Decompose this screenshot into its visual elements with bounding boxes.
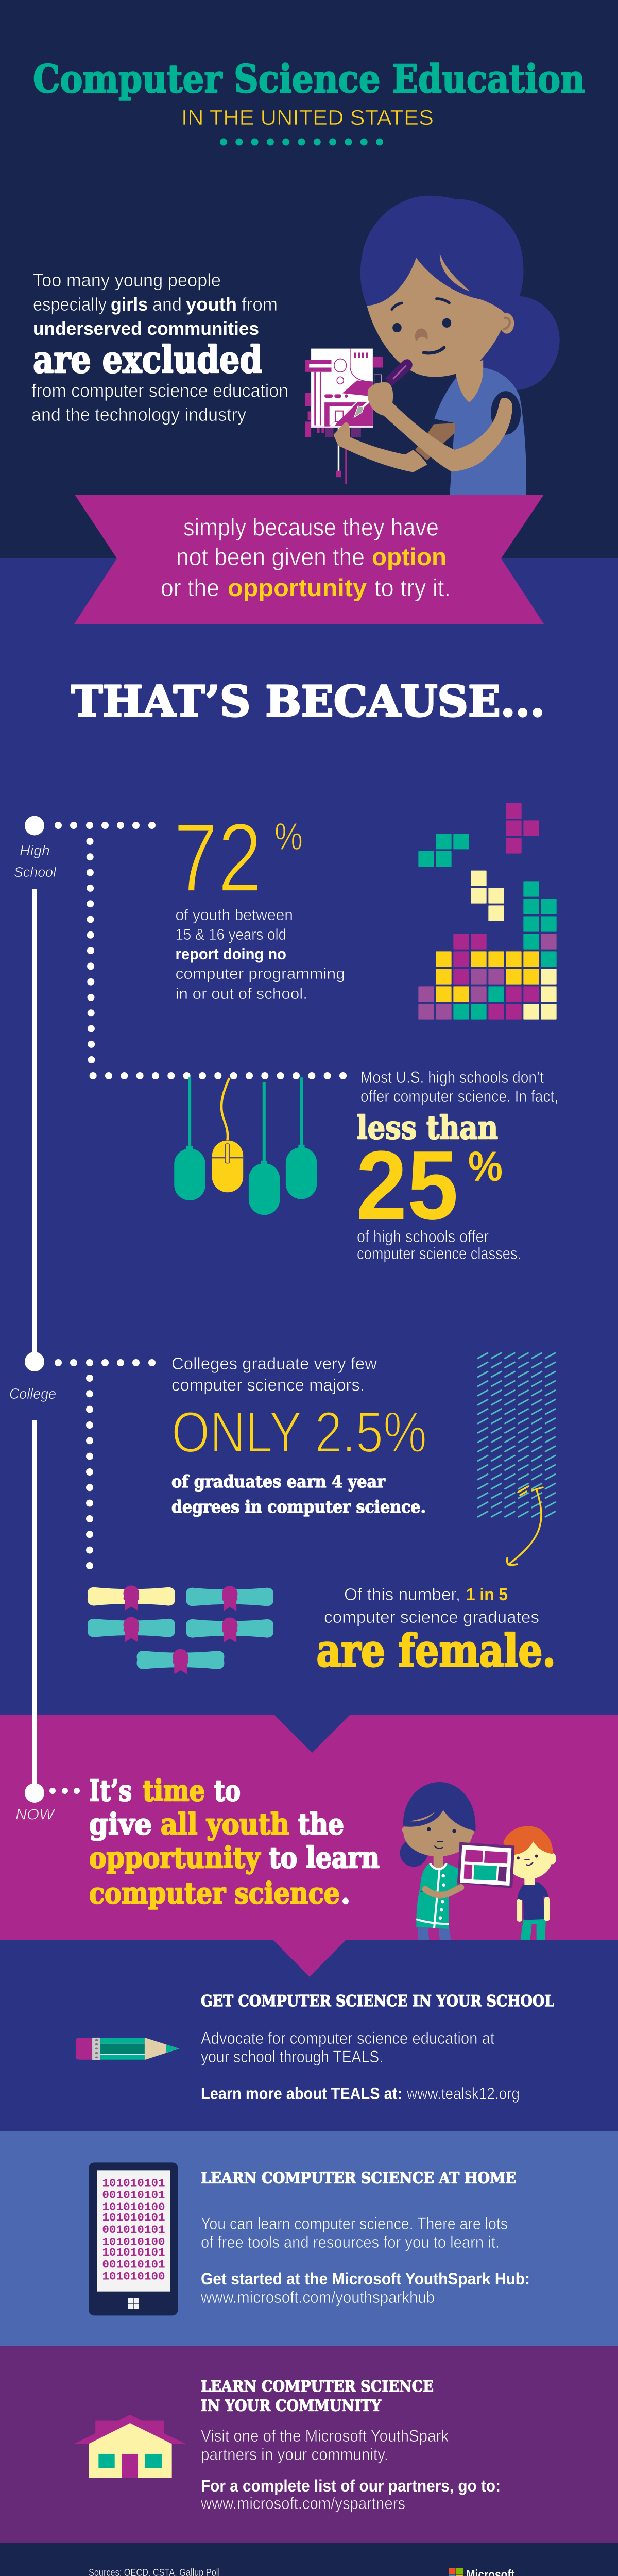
panel: learn at home: LEARN COMPUTER SCIENCE AT HOME bbox=[201, 2169, 516, 2188]
stat: 1 in 5 female bbox=[316, 1585, 556, 1677]
stat: less than 25 percent: computer science classes. bbox=[357, 1244, 521, 1263]
banner: simply because bbox=[74, 495, 544, 624]
panel: call to action band bbox=[0, 1715, 618, 1977]
banner: simply because: option bbox=[372, 543, 447, 570]
panel: learn in your community: Visit one of the Microsoft YouthSpark bbox=[201, 2427, 449, 2445]
stat: less than 25 percent: offer computer science. In fact, bbox=[360, 1087, 558, 1106]
eyes and brows bbox=[392, 318, 451, 332]
stat: only 2.5 percent: computer science majors. bbox=[171, 1376, 365, 1394]
banner: simply because: simply because they have bbox=[183, 513, 439, 541]
banner: simply because: not been given the bbox=[176, 543, 365, 570]
teacher bbox=[400, 1782, 476, 1940]
college node bbox=[25, 1352, 44, 1371]
stat: 72 percent: 15 & 16 years old bbox=[175, 925, 286, 943]
label: now: NOW bbox=[15, 1806, 56, 1823]
banner: simply because: or the bbox=[161, 574, 219, 601]
stat: 1 in 5 female: Of this number, bbox=[344, 1585, 460, 1604]
banner: simply because: opportunity bbox=[228, 574, 367, 601]
icon: phone with binary code: 101010101 bbox=[102, 2246, 165, 2259]
ear bbox=[500, 313, 514, 334]
stat: 72 percent bbox=[174, 803, 345, 1003]
stat: 72 percent: computer programming bbox=[175, 964, 345, 982]
panel: get computer science in your school: www.tealsk12.org bbox=[406, 2084, 520, 2103]
icon: phone with binary code: 001010101 bbox=[102, 2189, 165, 2202]
background: indigo statistics panel bbox=[0, 558, 618, 2131]
left arm bbox=[333, 422, 427, 472]
icon: phone with binary code: 001010101 bbox=[102, 2258, 165, 2271]
panel: get computer science in your school: your school through TEALS. bbox=[201, 2047, 383, 2066]
stat: only 2.5 percent: ONLY 2.5% bbox=[171, 1400, 427, 1464]
panel: learn in your community bbox=[0, 2346, 618, 2543]
call to action text: give bbox=[89, 1807, 152, 1841]
heading: that's because: THAT’S BECAUSE... bbox=[71, 677, 545, 726]
timeline bbox=[25, 816, 347, 1791]
illustration: girl repairing a circuit board bbox=[305, 196, 560, 496]
call to action text: opportunity bbox=[89, 1841, 261, 1875]
stat: 1 in 5 female: are female. bbox=[316, 1625, 556, 1677]
stat: less than 25 percent: Most U.S. high schools don’t bbox=[360, 1068, 544, 1087]
illustration: teacher and boy with tablet bbox=[400, 1782, 556, 1940]
intro text block: from bbox=[242, 294, 278, 315]
chart: hatch of graduates bbox=[477, 1351, 557, 1519]
tablet bbox=[457, 1842, 514, 1888]
panel: learn at home: of free tools and resources for you to learn it. bbox=[201, 2233, 500, 2251]
stat: only 2.5 percent: of graduates earn 4 year bbox=[171, 1471, 386, 1492]
intro text block: especially bbox=[33, 294, 107, 315]
stat: only 2.5 percent: degrees in computer science. bbox=[171, 1497, 426, 1517]
stat: only 2.5 percent: Colleges graduate very few bbox=[171, 1354, 377, 1373]
circuit board bbox=[305, 349, 383, 484]
diploma: teal 4 bbox=[137, 1649, 224, 1674]
diploma: teal 2 bbox=[88, 1617, 175, 1642]
label: high school: High bbox=[20, 842, 50, 858]
timeline line through band bbox=[32, 1710, 37, 1791]
dark forearm behind bbox=[415, 423, 455, 461]
icon: diplomas bbox=[88, 1585, 273, 1674]
stat: 72 percent: report doing no bbox=[175, 945, 286, 963]
icon: pencil bbox=[76, 2038, 179, 2060]
now dots bbox=[49, 1788, 80, 1794]
intro text block: youth bbox=[186, 294, 237, 315]
panel: learn in your community: IN YOUR COMMUNITY bbox=[201, 2397, 382, 2415]
stat: 1 in 5 female: computer science graduates bbox=[324, 1607, 539, 1626]
panel: learn at home: www.microsoft.com/youthsparkhub bbox=[200, 2288, 435, 2307]
intro text block bbox=[31, 269, 288, 425]
diploma: teal 3 bbox=[186, 1618, 273, 1642]
call to action text: computer science bbox=[89, 1876, 340, 1910]
nose bbox=[415, 329, 428, 342]
label: high school bbox=[14, 842, 57, 880]
intro text block: Too many young people bbox=[33, 269, 221, 291]
label: high school: School bbox=[14, 864, 57, 880]
icon: hanging computer mice bbox=[174, 1077, 317, 1215]
diploma: cream bbox=[88, 1585, 175, 1611]
call to action text: to bbox=[214, 1774, 241, 1808]
intro text block: are excluded bbox=[33, 337, 262, 381]
shirt bbox=[434, 368, 526, 496]
icon: house bbox=[74, 2415, 186, 2478]
panel: learn in your community: LEARN COMPUTER SCIENCE bbox=[201, 2378, 434, 2396]
stat: less than 25 percent: % bbox=[468, 1143, 503, 1190]
hair bbox=[360, 196, 560, 390]
icon: phone with binary code: 101010100 bbox=[102, 2235, 165, 2248]
neck bbox=[455, 360, 483, 402]
stat: 1 in 5 female: 1 in 5 bbox=[466, 1585, 508, 1604]
stat: only 2.5 percent bbox=[171, 1354, 427, 1517]
panel: get computer science in your school bbox=[201, 1992, 554, 2103]
icon: phone with binary code: 101010101 bbox=[102, 2212, 165, 2225]
panel: learn in your community: For a complete list of our partners, go to: bbox=[201, 2477, 501, 2495]
high school dotted connector bbox=[55, 822, 347, 1079]
stat: less than 25 percent: less than bbox=[357, 1109, 498, 1146]
college dotted connector bbox=[55, 1359, 156, 1569]
stat: 72 percent: % bbox=[274, 815, 303, 858]
icon: phone with binary code: 101010100 bbox=[102, 2201, 165, 2214]
icon: phone with binary code: 101010101 bbox=[102, 2177, 165, 2190]
subtitle: IN THE UNITED STATES bbox=[181, 106, 434, 129]
stat: less than 25 percent bbox=[356, 1068, 558, 1263]
intro text block: girls bbox=[111, 294, 148, 315]
high school node bbox=[25, 816, 44, 836]
right arm and fist bbox=[368, 382, 512, 471]
panel: learn at home: Get started at the Microsoft YouthSpark Hub: bbox=[201, 2269, 530, 2288]
banner: simply because: to try it. bbox=[374, 574, 451, 601]
call to action text: all youth bbox=[161, 1807, 289, 1841]
icon: phone with binary code: 101010100 bbox=[102, 2270, 165, 2283]
panel: learn at home bbox=[0, 2131, 618, 2346]
panel: get computer science in your school: GET COMPUTER SCIENCE IN YOUR SCHOOL bbox=[201, 1992, 554, 2010]
boy bbox=[503, 1826, 556, 1940]
panel: learn in your community: www.microsoft.com/yspartners bbox=[200, 2494, 405, 2513]
stat: less than 25 percent: 25 bbox=[356, 1131, 458, 1240]
face bbox=[367, 258, 507, 377]
stat: 72 percent: in or out of school. bbox=[175, 985, 307, 1003]
stat: 72 percent: 72 bbox=[174, 803, 262, 912]
call to action text: It’s bbox=[89, 1774, 132, 1808]
diploma: teal 1 bbox=[186, 1586, 273, 1611]
intro text block: underserved communities bbox=[33, 318, 259, 339]
intro text block: and the technology industry bbox=[31, 404, 246, 425]
background: navy top bbox=[0, 0, 618, 558]
title dots bbox=[220, 138, 383, 145]
mouth bbox=[424, 347, 444, 353]
label: college: College bbox=[9, 1386, 56, 1402]
now node bbox=[25, 1783, 44, 1803]
call to action text bbox=[89, 1774, 380, 1910]
stat: less than 25 percent: of high schools offer bbox=[357, 1227, 489, 1246]
hair sliver bbox=[440, 253, 470, 291]
logo: microsoft philanthropies bbox=[449, 2567, 557, 2576]
panel: get computer science in your school: Advocate for computer science education at bbox=[201, 2029, 494, 2047]
panel: footer bbox=[0, 2543, 618, 2576]
icon: tetris blocks bbox=[418, 803, 557, 1020]
armhole bbox=[491, 391, 521, 435]
stat: 72 percent: of youth between bbox=[175, 906, 293, 924]
call to action text: to learn bbox=[269, 1841, 380, 1875]
panel: learn in your community: partners in your community. bbox=[201, 2445, 388, 2464]
icon: phone with binary code: 001010101 bbox=[102, 2224, 165, 2236]
panel: get computer science in your school: Learn more about TEALS at: bbox=[201, 2084, 402, 2103]
call to action text: time bbox=[143, 1774, 205, 1808]
timeline line bbox=[32, 889, 37, 1791]
icon: phone with binary code bbox=[89, 2162, 178, 2315]
panel: learn at home: You can learn computer science. There are lots bbox=[201, 2214, 508, 2233]
intro text block: and bbox=[152, 294, 182, 315]
arrow: to female graduates bbox=[507, 1486, 543, 1565]
call to action text: . bbox=[341, 1876, 350, 1910]
call to action text: the bbox=[298, 1807, 344, 1841]
screwdriver handle bbox=[385, 359, 413, 386]
intro text block: from computer science education bbox=[31, 380, 288, 401]
